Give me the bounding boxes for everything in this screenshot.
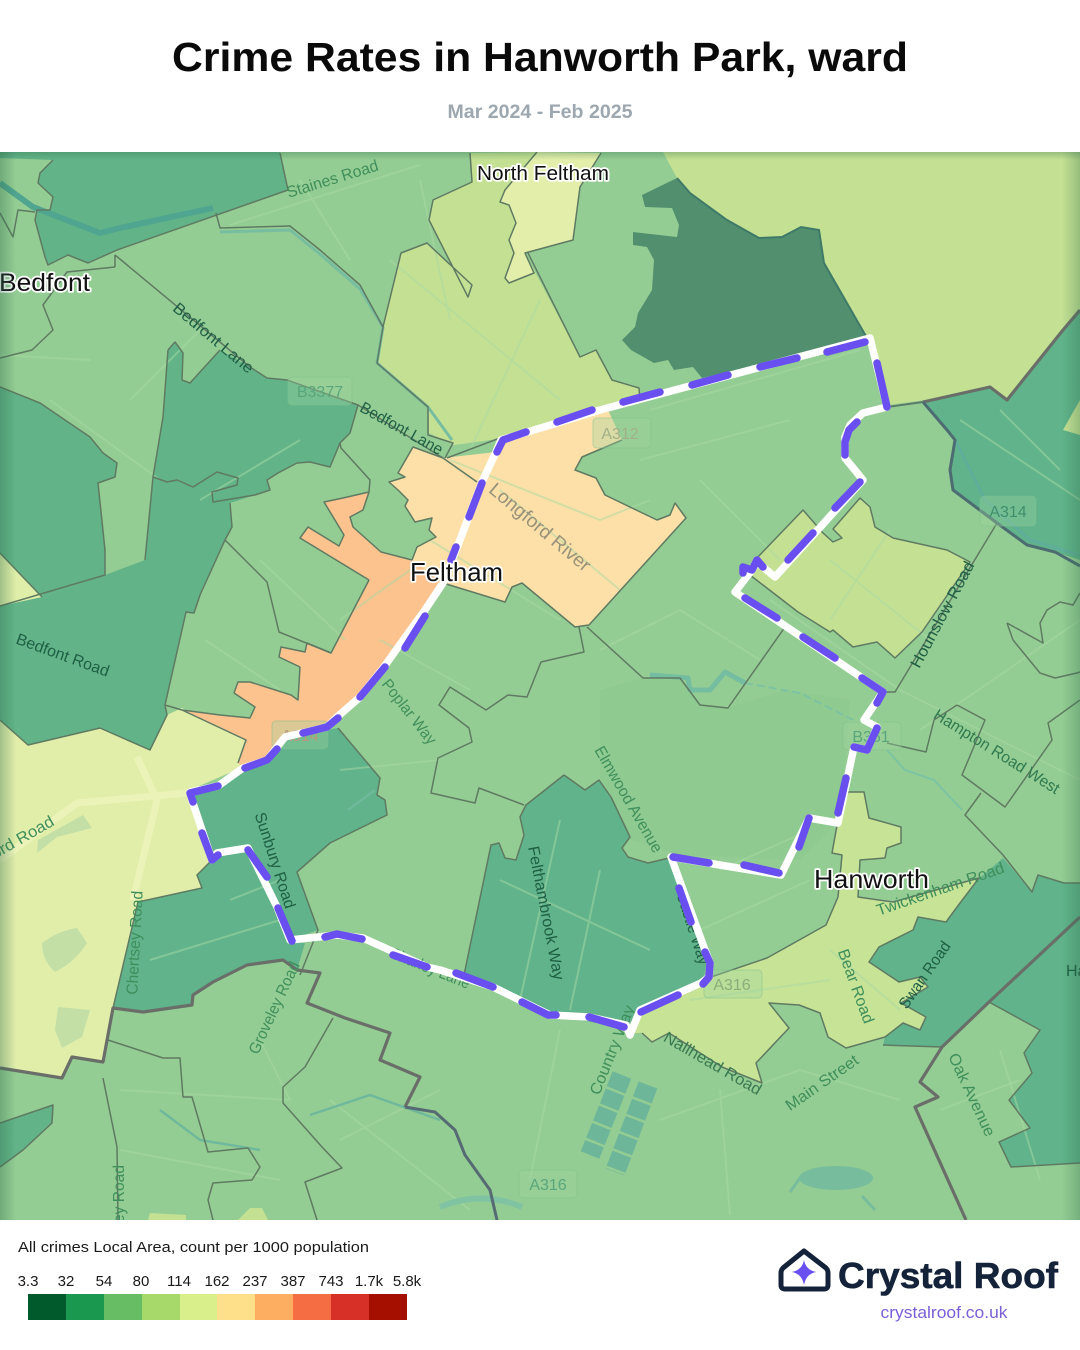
minor road labels: Bedfont Road	[14, 631, 111, 681]
area: dark green east	[923, 310, 1080, 560]
area: light green north	[378, 152, 640, 445]
minor road labels: Hampton Road West	[930, 707, 1063, 798]
minor road labels: Bear Road	[834, 947, 877, 1026]
website link: crystalroof.co.uk	[880, 1304, 1008, 1322]
thick borough boundaries	[0, 178, 1080, 1220]
thin neighbourhood boundaries	[0, 152, 1080, 1220]
minor road labels: Bedfont Lane	[169, 300, 257, 377]
legend values: 80	[133, 1273, 149, 1290]
road number badges: B361	[852, 729, 890, 746]
place labels: North Feltham	[477, 163, 609, 185]
road number badges: B3377	[297, 384, 343, 401]
minor road labels: Chertsey Road	[124, 890, 147, 995]
area: dark green Sunbury south	[113, 848, 305, 1012]
minor road labels: Main Street	[783, 1052, 863, 1115]
map edge vignette	[0, 152, 1080, 1220]
legend values	[18, 1273, 422, 1290]
legend values: 5.8k	[393, 1273, 422, 1290]
legend values: 237	[242, 1273, 268, 1290]
minor road labels: Charley Lane	[387, 945, 472, 993]
minor road labels: Nallhead Road	[660, 1029, 764, 1099]
minor road labels: Hounslow Road	[908, 559, 978, 671]
road number badges	[272, 377, 1036, 1198]
area: light green north-east	[663, 152, 1080, 405]
legend values: 3.3	[18, 1273, 38, 1290]
area: light green near Hounslow Road	[750, 498, 970, 658]
minor road labels: Twickenham Road	[874, 860, 1007, 920]
legend values: 1.7k	[355, 1273, 384, 1290]
area: pale patch south	[148, 1213, 186, 1220]
minor road labels: Felthambrook Way	[524, 845, 567, 982]
legend values: 32	[58, 1273, 74, 1290]
minor road labels: Groveley Road	[246, 959, 304, 1057]
area: dark green west	[0, 387, 117, 606]
logo: Crystal Roof	[781, 1251, 1059, 1322]
ward boundary dashes	[190, 342, 887, 1027]
area: light sliver east	[1063, 400, 1080, 435]
road number badges: A316	[529, 1177, 567, 1194]
area: beige Longford River	[389, 410, 686, 627]
area: light green Hanworth	[630, 792, 979, 1083]
place labels: Hanworth	[814, 864, 929, 894]
logo wordmark: Crystal Roof	[838, 1255, 1059, 1296]
title: Crime Rates in Hanworth Park, ward	[172, 34, 908, 80]
minor road labels: Poplar Way	[378, 676, 439, 748]
minor road labels: Chertsey Road	[111, 1165, 128, 1269]
area: pale triangle west	[0, 553, 42, 606]
minor road labels: Elmwood Avenue	[591, 744, 665, 856]
water features	[0, 183, 1080, 1210]
area: dark green Felthambrook	[464, 775, 711, 1028]
legend values: 54	[96, 1273, 112, 1290]
area: pale yellow-green south-west	[0, 708, 246, 1078]
legend values: 114	[167, 1273, 191, 1290]
area: orange Feltham centre	[182, 492, 443, 767]
area: dark patch south-west	[0, 1105, 53, 1167]
river label: Longford River	[485, 479, 595, 577]
minor road labels: Oak Avenue	[944, 1051, 998, 1140]
place labels: Feltham	[410, 557, 503, 587]
minor road labels: Swan Road	[896, 939, 955, 1012]
area: dark green Swan Road	[869, 858, 1080, 1047]
minor road labels: Castle Way	[673, 890, 712, 967]
legend	[18, 1239, 422, 1320]
area: dark green Bedfont Lane	[0, 342, 358, 750]
legend values: 743	[318, 1273, 344, 1290]
area: dark green north-west	[0, 152, 288, 265]
minor road labels: Country Way	[587, 1003, 639, 1098]
area: dark green far east	[989, 917, 1080, 1167]
area: darkest green estate	[622, 178, 867, 378]
area: pale patch south 2	[238, 1208, 268, 1220]
subtitle: date range: Mar 2024 - Feb 2025	[448, 102, 633, 123]
subtle darker ward interior	[600, 678, 850, 860]
minor road labels: Bedfont Lane	[357, 399, 446, 459]
place labels	[0, 163, 929, 894]
legend values: 162	[204, 1273, 230, 1290]
minor road labels: Staines Road	[285, 158, 381, 202]
icon: house with star	[781, 1251, 828, 1289]
legend title: All crimes Local Area, count per 1000 population	[18, 1239, 369, 1256]
legend values: 387	[280, 1273, 306, 1290]
ward boundary: Hanworth Park	[190, 338, 887, 1035]
road number badges: A314	[989, 504, 1027, 521]
road number badges: A316	[713, 977, 751, 994]
road number badges: A312	[601, 426, 639, 443]
base area: mid green neighbourhoods	[0, 152, 1080, 1220]
minor road labels: Sunbury Road	[251, 810, 298, 911]
road network	[0, 165, 1080, 1215]
place labels: Bedfont	[0, 269, 90, 297]
area: dark green Sunbury north	[190, 728, 387, 940]
road number badges: A314	[281, 728, 319, 745]
area: North Feltham pale	[500, 152, 601, 283]
legend colour scale	[28, 1294, 407, 1320]
